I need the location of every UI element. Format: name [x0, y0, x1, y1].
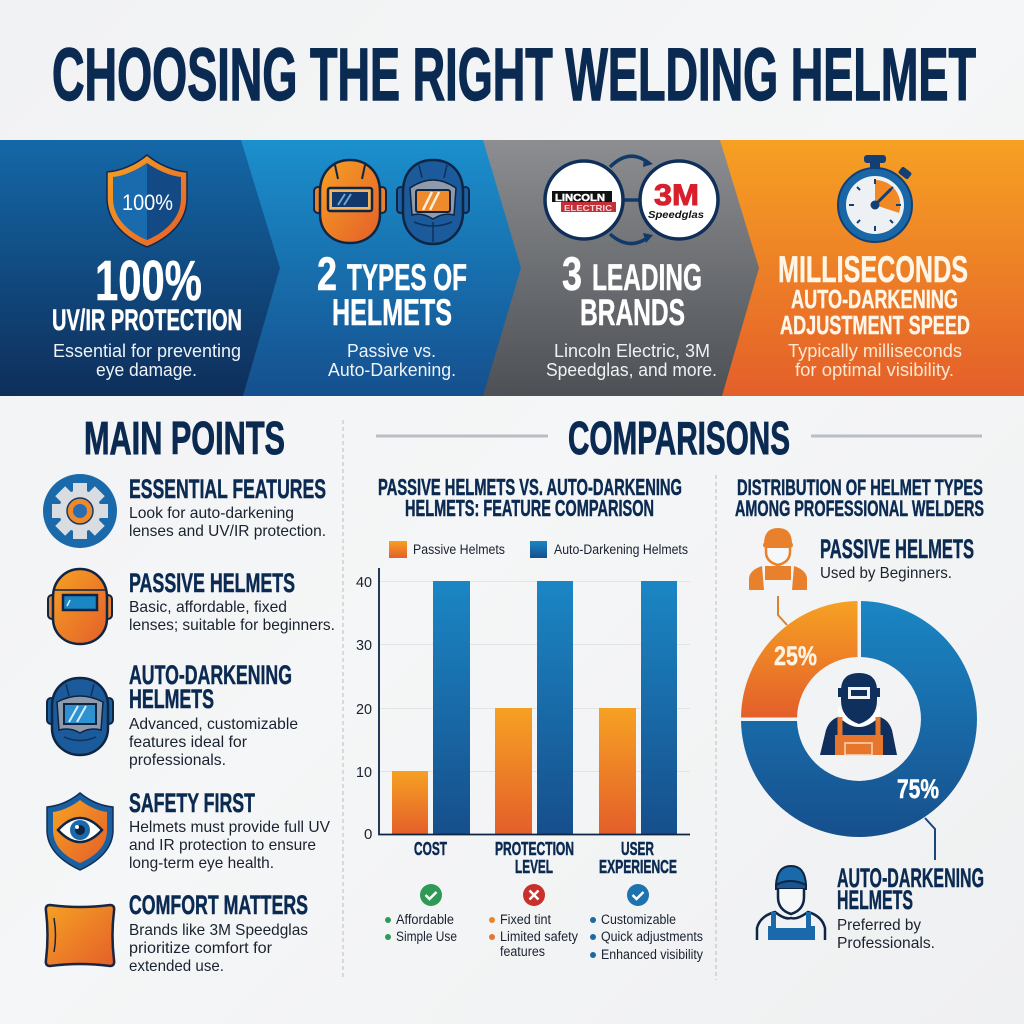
y axis labels: 0 — [364, 826, 372, 843]
chart legend — [389, 541, 688, 558]
panel: UV/IR protection — [0, 140, 280, 396]
text: milliseconds description: for optimal visibility. — [795, 360, 954, 380]
heading: 3 leading brands: BRANDS — [580, 292, 685, 333]
category: user experience — [590, 839, 703, 962]
icon: red cross — [523, 884, 545, 906]
text: milliseconds description — [788, 341, 962, 380]
text: professionals. — [129, 752, 226, 769]
category: protection level: LEVEL — [515, 857, 553, 877]
heading: 2 types of helmets: TYPES OF — [347, 257, 467, 298]
heading: COMFORT MATTERS — [129, 890, 308, 920]
text — [129, 599, 335, 634]
heading: PASSIVE HELMETS — [129, 568, 295, 598]
label: 75%: 75% — [897, 774, 939, 804]
heading: 3 leading brands — [562, 247, 702, 333]
text: protection description: Essential for preventing — [53, 341, 241, 361]
heading: 3 leading brands: LEADING — [592, 257, 702, 298]
icon: brand logos: Speedglas — [648, 210, 704, 221]
heading: 2 types of helmets — [317, 247, 467, 333]
segment: 75% auto-darkening — [741, 601, 977, 837]
text: prioritize comfort for — [129, 940, 273, 957]
category: cost — [385, 839, 457, 944]
text: types description — [328, 341, 456, 380]
heading: SAFETY FIRST — [129, 788, 255, 818]
chart legend: Auto-Darkening Helmets — [554, 542, 688, 557]
list: Simple Use — [396, 929, 457, 944]
text: brands description: Speedglas, and more. — [546, 360, 717, 380]
heading: 2 types of helmets: 2 — [317, 247, 337, 300]
passive helmets label: Used by Beginners. — [820, 565, 952, 582]
auto-darkening helmets label: Professionals. — [837, 935, 935, 952]
icon: shield 100% — [107, 155, 187, 247]
list: Customizable — [601, 912, 676, 927]
heading: comparisons: COMPARISONS — [568, 412, 790, 464]
category: user experience: EXPERIENCE — [599, 857, 677, 877]
y axis labels: 40 — [356, 574, 372, 591]
list — [385, 912, 457, 944]
text: Advanced, customizable — [129, 716, 298, 733]
icon: brand logos: ELECTRIC — [564, 203, 612, 213]
heading: ESSENTIAL FEATURES — [129, 474, 326, 504]
auto-darkening helmets label: HELMETS — [837, 885, 913, 915]
auto-darkening helmets label: Preferred by — [837, 917, 921, 934]
icon: orange worker — [749, 528, 807, 590]
list: Limited safety — [500, 929, 578, 944]
leader line: passive — [778, 596, 787, 625]
text: types description: Auto-Darkening. — [328, 360, 456, 380]
heading: 100%: 100% — [95, 249, 202, 313]
leader line: auto-darkening — [925, 818, 935, 860]
text — [129, 922, 308, 975]
icon: shield with eye — [47, 793, 113, 870]
list: features — [500, 944, 545, 959]
main point: comfort matters — [46, 890, 308, 975]
banner: key statistics — [0, 140, 1024, 396]
text: long-term eye health. — [129, 855, 274, 872]
panel: milliseconds — [700, 140, 1024, 396]
text: Helmets must provide full UV — [129, 819, 330, 836]
auto-darkening helmets label — [837, 863, 984, 952]
main point: auto-darkening helmets — [47, 660, 298, 769]
text — [129, 819, 330, 872]
text: Brands like 3M Speedglas — [129, 922, 308, 939]
donut chart — [741, 601, 977, 837]
icon: brand logos: 3M — [654, 179, 699, 212]
category: user experience: USER — [621, 839, 654, 859]
icon: auto-darkening helmet — [397, 160, 469, 244]
chart heading: PASSIVE HELMETS VS. AUTO-DARKENING — [378, 474, 682, 500]
text: brands description: Lincoln Electric, 3M — [554, 341, 710, 361]
bar chart — [356, 568, 690, 843]
text: Look for auto-darkening — [129, 505, 294, 522]
panel: leading brands — [470, 140, 759, 396]
text: Basic, affordable, fixed — [129, 599, 287, 616]
chart legend: Passive Helmets — [413, 542, 505, 557]
main point: passive helmets — [48, 568, 335, 644]
y axis labels: 10 — [356, 764, 372, 781]
list: Fixed tint — [500, 912, 551, 927]
chart heading: HELMETS: FEATURE COMPARISON — [405, 495, 654, 521]
heading: AUTO-DARKENING — [129, 660, 292, 690]
icon: stopwatch — [838, 155, 912, 242]
y axis labels: 30 — [356, 637, 372, 654]
heading: 2 types of helmets: HELMETS — [332, 292, 452, 333]
panel: types of helmets — [230, 140, 521, 396]
text: milliseconds description: Typically milliseconds — [788, 341, 962, 361]
segment: 25% passive — [741, 601, 858, 718]
bars: cost — [392, 581, 470, 834]
list: Quick adjustments — [601, 929, 703, 944]
text: types description: Passive vs. — [347, 341, 436, 361]
icon: green check — [420, 884, 442, 906]
icon: welder — [820, 673, 897, 755]
category: protection level — [489, 839, 578, 959]
label: 25%: 25% — [774, 641, 817, 671]
icon: blue worker — [757, 866, 825, 940]
icon: brand logos — [545, 156, 718, 244]
list — [489, 912, 578, 959]
y axis labels: 20 — [356, 701, 372, 718]
icon: auto-darkening helmet — [47, 678, 113, 755]
heading: adjustment speed: AUTO-DARKENING — [791, 286, 958, 314]
text: extended use. — [129, 958, 224, 975]
icon: gear — [43, 474, 117, 548]
icon: pillow — [46, 905, 114, 966]
distribution heading — [735, 475, 984, 521]
heading: adjustment speed — [780, 286, 970, 340]
heading: HELMETS — [129, 684, 214, 714]
passive helmets label — [820, 534, 974, 582]
main point: essential features — [43, 474, 326, 548]
text — [129, 505, 326, 540]
category: protection level: PROTECTION — [495, 839, 574, 859]
icon: shield 100%: 100% — [122, 190, 173, 215]
heading: main points: MAIN POINTS — [84, 412, 285, 464]
y axis labels — [356, 574, 372, 843]
text: and IR protection to ensure — [129, 837, 316, 854]
chart heading — [378, 474, 682, 521]
heading: UV/IR protection: UV/IR PROTECTION — [52, 304, 242, 337]
icon: passive helmet — [314, 160, 386, 243]
heading — [129, 660, 292, 714]
main point: safety first — [47, 788, 330, 872]
bars: protection level — [495, 581, 573, 834]
text: features ideal for — [129, 734, 248, 751]
icon: passive helmet — [48, 569, 112, 644]
text: lenses and UV/IR protection. — [129, 523, 326, 540]
text: lenses; suitable for beginners. — [129, 617, 335, 634]
text: brands description — [546, 341, 717, 380]
text — [129, 716, 298, 769]
icon: blue check — [627, 884, 649, 906]
bars: user experience — [599, 581, 677, 834]
list — [590, 912, 703, 962]
list: Affordable — [396, 912, 454, 927]
text: protection description: eye damage. — [96, 360, 197, 380]
text: protection description — [53, 341, 241, 380]
heading: 3 leading brands: 3 — [562, 247, 582, 300]
category: cost: COST — [414, 839, 447, 859]
icon: brand logos: LINCOLN — [555, 192, 605, 204]
list: Enhanced visibility — [601, 947, 703, 962]
